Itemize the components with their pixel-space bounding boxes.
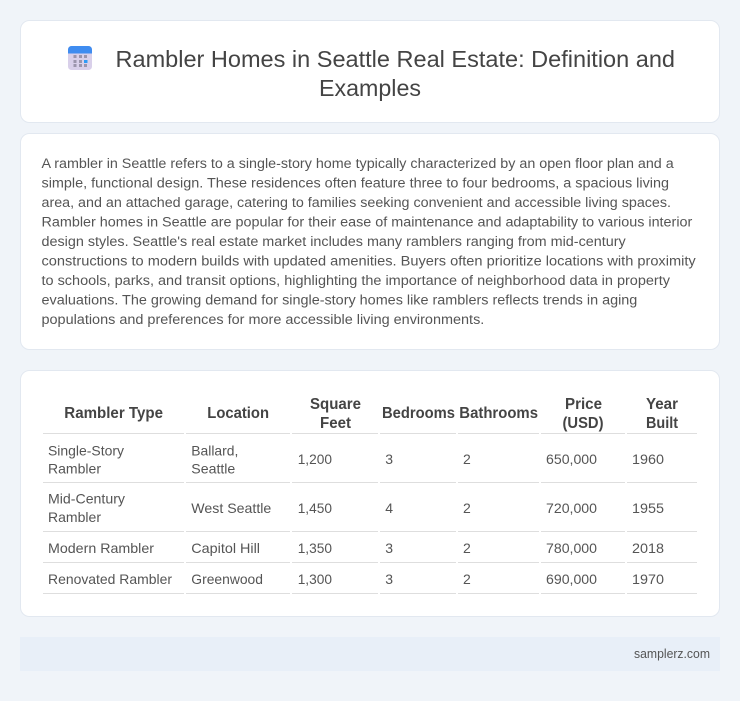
text block: rambler description: Rambler homes in Seattle are popular for their ease of maintenance and adaptability to various interior [42,214,693,230]
table row: Modern Rambler: 780,000 [546,540,597,556]
table row: Modern Rambler: 2018 [632,540,664,556]
table row: Renovated Rambler: 690,000 [546,571,597,587]
table row: Single-Story Rambler: 1960 [632,451,664,467]
table row: Renovated Rambler [48,571,664,587]
table header row: (USD) [562,415,604,432]
table row: Single-Story Rambler: 1,200 [298,451,332,467]
table row: Mid-Century Rambler: Mid-Century [48,490,125,506]
text block: rambler description: A rambler in Seattle refers to a single-story home typically characterized by an open floor plan and a [42,156,674,172]
table header row: Bedrooms [382,405,455,422]
footer source text: samplerz.com [634,647,710,661]
table header row: Year [646,396,678,413]
table row: Mid-Century Rambler [48,490,664,525]
table header row [64,396,678,432]
table row: Modern Rambler: Modern Rambler [48,540,154,556]
table row: Renovated Rambler: 2 [463,571,471,587]
table header row: Location [207,405,269,422]
table row: Mid-Century Rambler: 2 [463,500,471,516]
table row: Mid-Century Rambler: 720,000 [546,500,597,516]
table row: Modern Rambler: 2 [463,540,471,556]
table row: Single-Story Rambler: Rambler [48,460,101,476]
table row: Mid-Century Rambler: Rambler [48,509,101,525]
table header row: Price [565,396,602,413]
table row: Single-Story Rambler: Single-Story [48,442,124,458]
table row: Single-Story Rambler: 650,000 [546,451,597,467]
table row: Modern Rambler [48,540,664,556]
table row: Modern Rambler: 3 [385,540,393,556]
table row: Single-Story Rambler: 3 [385,451,393,467]
text block: rambler description: to schools, parks, and transit options, highlighting the importance of neighborhood data in property [42,273,671,289]
table row: Mid-Century Rambler: 1,450 [298,500,332,516]
text block: rambler description: constructions to modern builds with updated amenities. Buyers often prioritize locations with proximity [42,254,697,270]
text block: rambler description: evaluations. The growing demand for single-story homes like ramblers reflects trends in aging [42,292,637,308]
table header row: Bathrooms [459,405,538,422]
panel: data table [20,370,720,616]
text block: rambler description: populations and preferences for more accessible living environments. [42,312,484,328]
panel: description [20,134,720,350]
table row: Renovated Rambler: 1970 [632,571,664,587]
table row: Renovated Rambler: 1,300 [298,571,332,587]
table header row: Rambler Type [64,405,163,422]
footer bar [20,637,720,671]
table row: Single-Story Rambler [48,442,664,476]
title: Rambler Homes in Seattle Real Estate: Definition and [116,46,675,72]
text block: rambler description: simple, functional design. These residences often feature three to four bedrooms, a spacious living [42,176,669,192]
icon: calendar [68,46,92,70]
table row: Renovated Rambler: Greenwood [191,571,263,587]
text block: rambler description: design styles. Seattle's real estate market includes many ramblers ranging from mid-century [42,234,627,250]
text block: rambler description: area, and an attached garage, catering to families seeking convenient and accessible living spaces. [42,195,671,211]
table row: Renovated Rambler: 3 [385,571,393,587]
table row: Single-Story Rambler: 2 [463,451,471,467]
table row: Renovated Rambler: Renovated Rambler [48,571,172,587]
table header row: Feet [320,415,351,432]
table row: Mid-Century Rambler: 4 [385,500,393,516]
panel: title header [20,20,720,122]
title: Examples [319,75,421,101]
table row: Modern Rambler: 1,350 [298,540,332,556]
table row: Modern Rambler: Capitol Hill [191,540,260,556]
table row: Single-Story Rambler: Seattle [191,460,236,476]
table header row: Square [310,396,361,413]
table row: Mid-Century Rambler: 1955 [632,500,664,516]
table row: Single-Story Rambler: Ballard, [191,442,238,458]
table header row: Built [646,415,678,432]
table row: Mid-Century Rambler: West Seattle [191,500,272,516]
